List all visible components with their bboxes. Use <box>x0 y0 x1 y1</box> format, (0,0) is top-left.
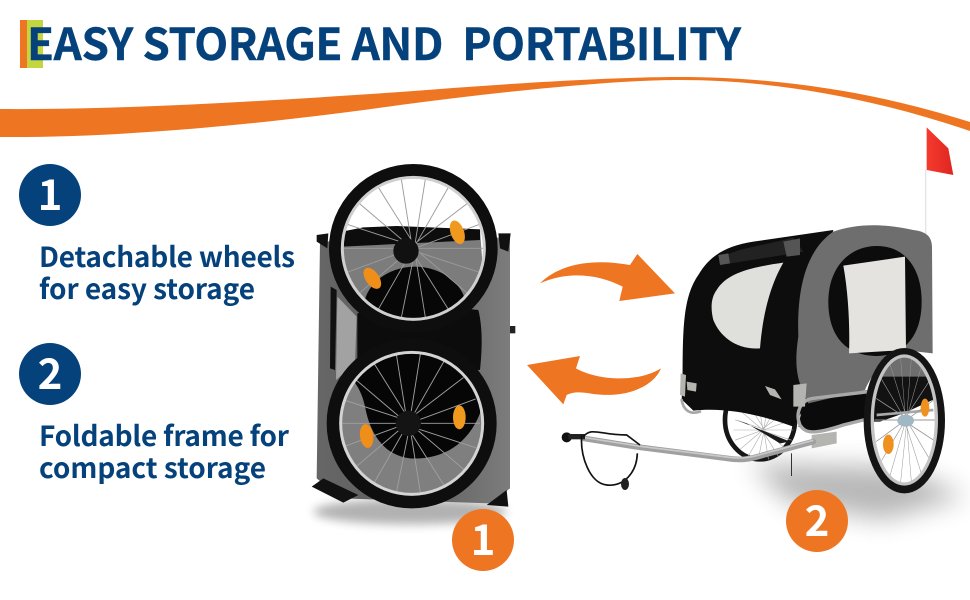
badge: orange 2: 2 <box>805 488 829 549</box>
bottom wheel <box>334 346 489 501</box>
badge: orange 2 <box>786 488 848 552</box>
badge: navy 1 <box>19 162 81 226</box>
front window <box>712 263 783 348</box>
grey side panel <box>796 225 933 403</box>
badge: navy 2: 2 <box>38 341 62 402</box>
folded trailer with stacked wheels <box>312 172 515 524</box>
text: foldable frame: compact storage <box>39 447 266 487</box>
title accent bars <box>20 20 43 68</box>
badge: orange 1: 1 <box>471 507 495 568</box>
text: foldable frame <box>39 415 290 487</box>
arrow: to right <box>540 254 675 301</box>
assembled trailer <box>562 127 967 520</box>
drawbar <box>562 432 813 490</box>
far wheel <box>725 381 795 459</box>
text: detachable wheels <box>39 236 295 308</box>
top roll <box>718 237 803 265</box>
black body <box>682 230 833 427</box>
text: foldable frame: Foldable frame for <box>39 415 290 455</box>
arrow: to left <box>527 356 661 404</box>
badge: navy 1: 1 <box>38 162 62 223</box>
near wheel <box>868 352 941 489</box>
title: EASY STORAGE AND PORTABILITY <box>27 9 741 73</box>
badge: navy 2 <box>19 341 81 405</box>
text: detachable wheels: for easy storage <box>39 268 255 308</box>
orange swoosh <box>0 77 970 137</box>
badge: orange 1 <box>452 507 514 571</box>
frame tubes <box>682 392 868 432</box>
top wheel <box>337 172 490 353</box>
side window <box>828 246 922 356</box>
underside black pocket <box>798 390 867 433</box>
flag <box>925 127 953 268</box>
text: detachable wheels: Detachable wheels <box>39 236 295 276</box>
frame brackets <box>680 373 837 448</box>
